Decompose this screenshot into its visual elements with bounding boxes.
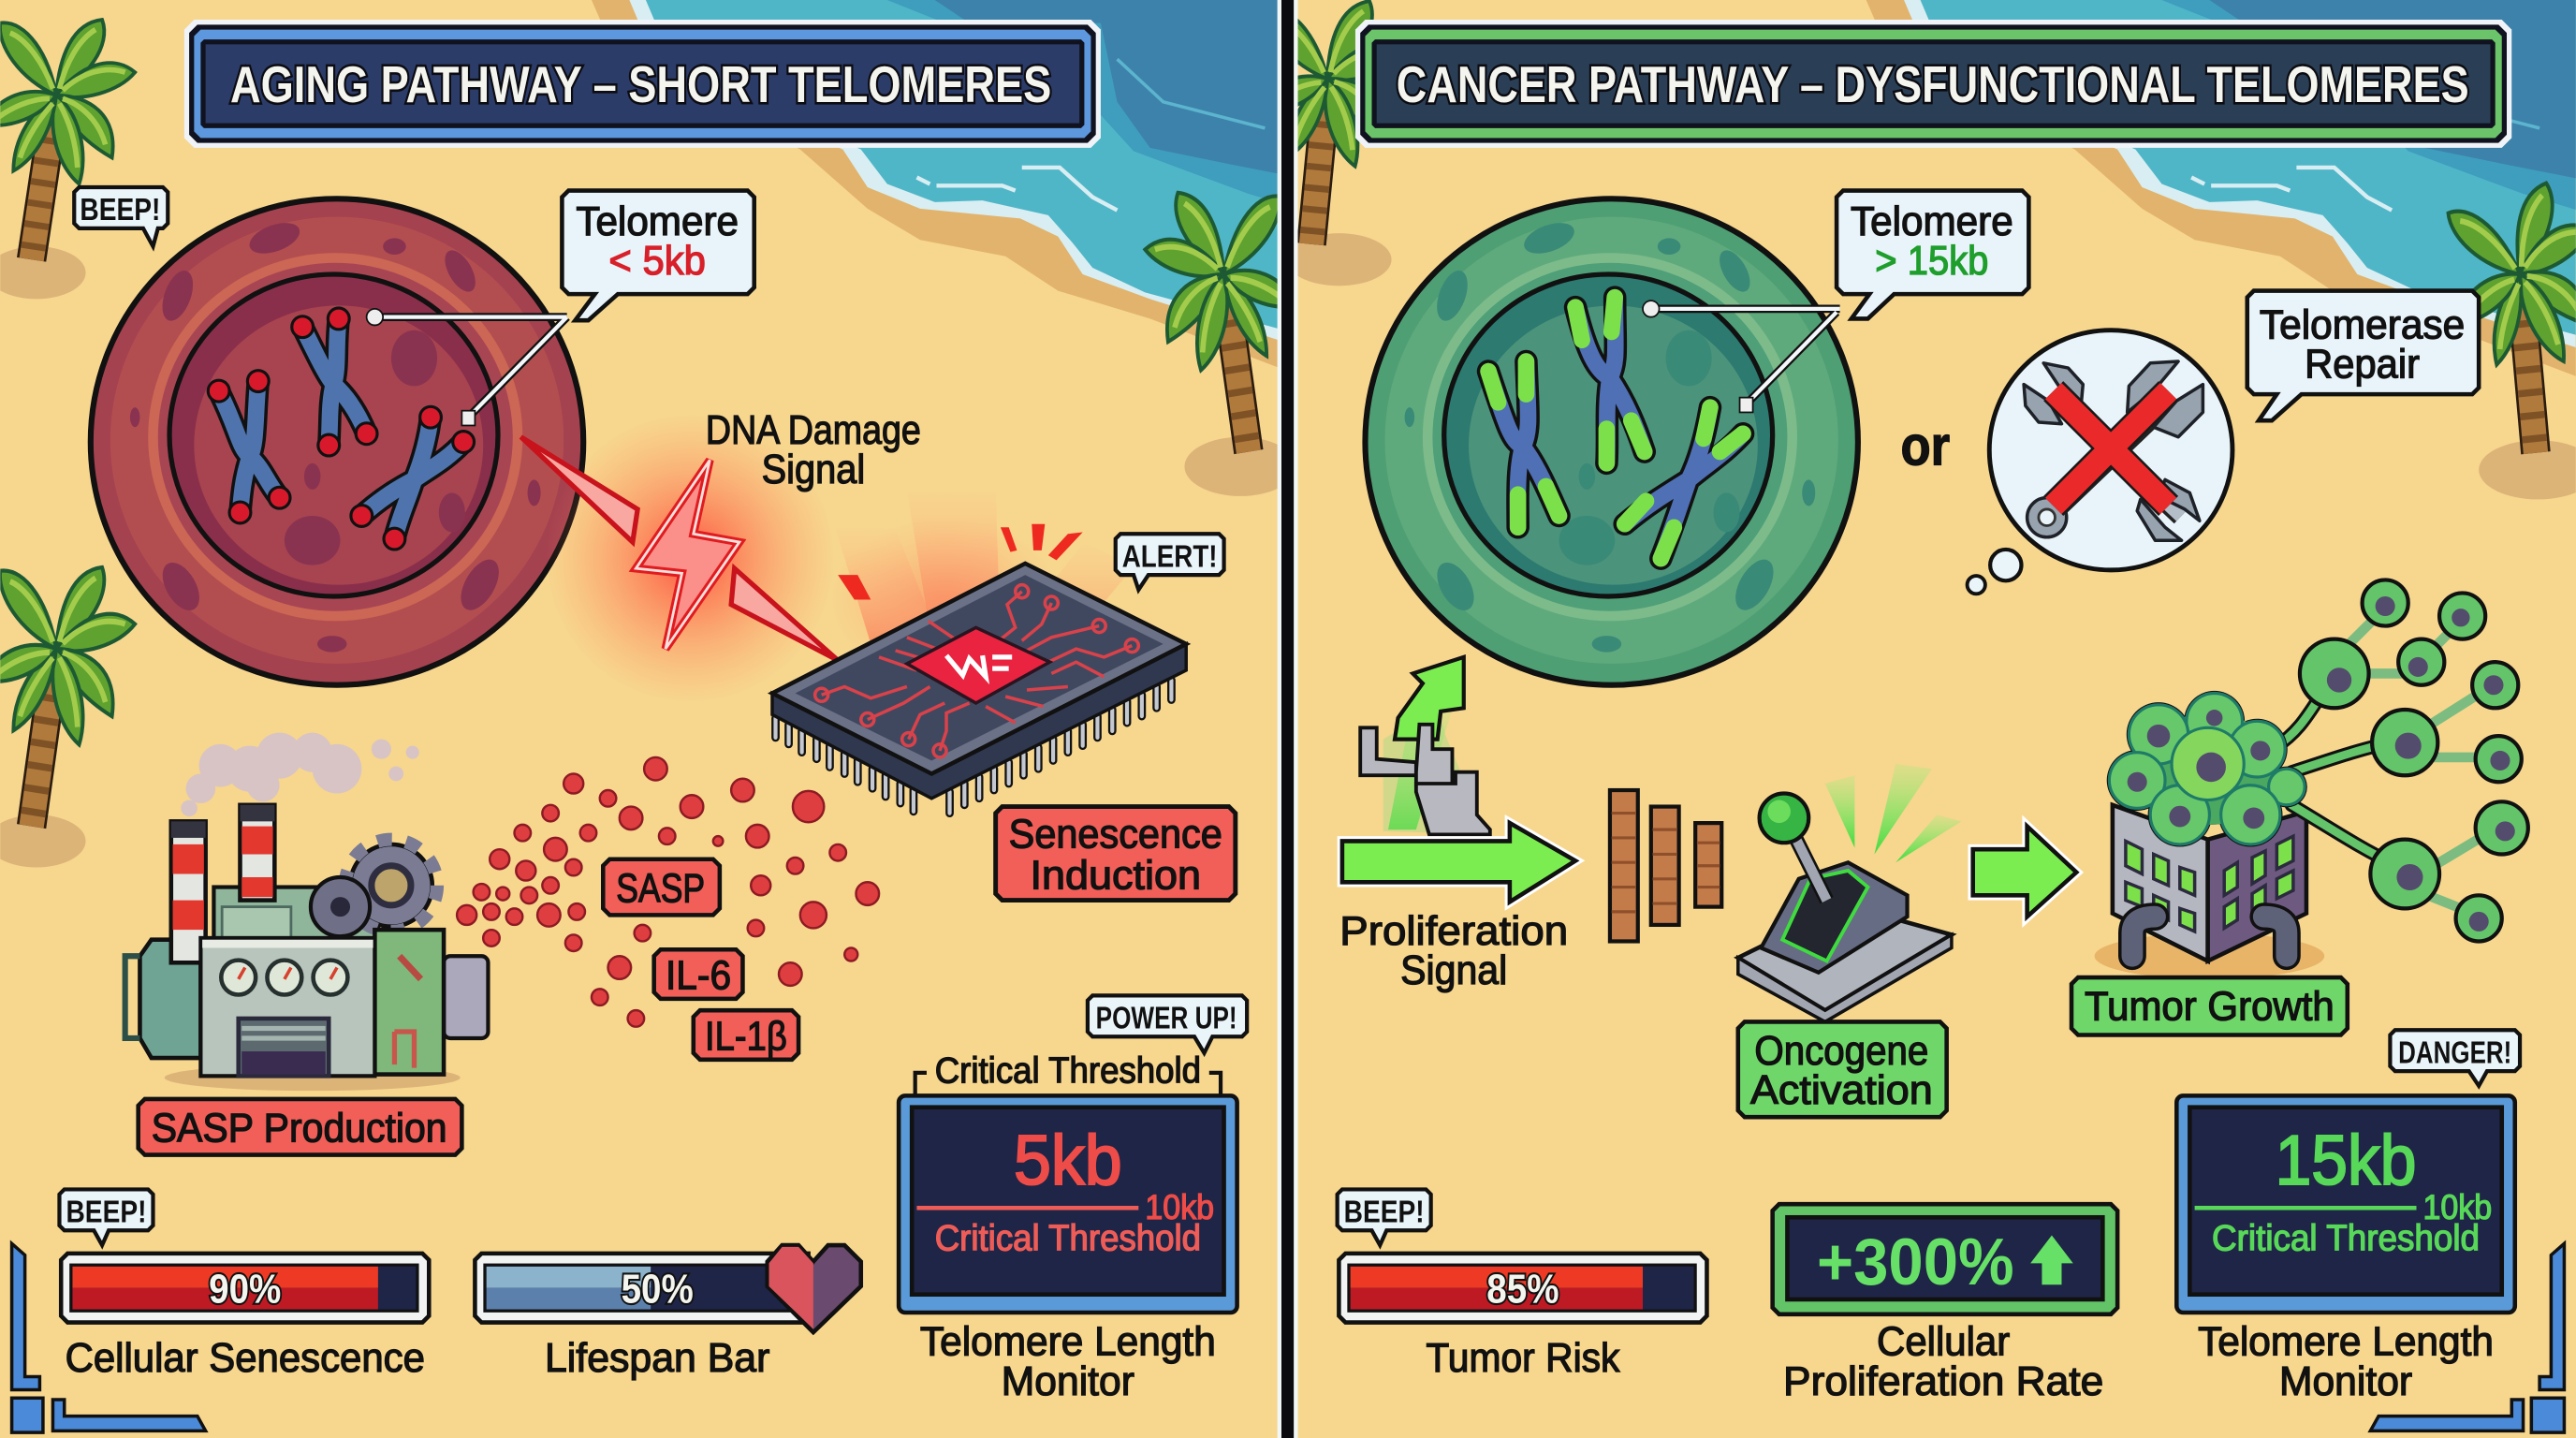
label: proliferation signal [1339, 908, 1568, 993]
palm trees right panel [1297, 0, 2576, 1314]
bar: tumor risk 85%: 85% [1486, 1266, 1559, 1312]
label: telomere length monitor [2198, 1319, 2494, 1404]
tumor cluster [2107, 691, 2307, 847]
stat box: +300% proliferation: +300% [1817, 1225, 2014, 1299]
label: IL-1 beta: IL-1β [705, 1013, 787, 1059]
label: oncogene activation [1738, 1021, 1947, 1117]
label: proliferation signal: Signal [1400, 947, 1507, 993]
smoke [181, 733, 419, 816]
label: lifespan bar: Lifespan Bar [545, 1335, 769, 1381]
label: cellular proliferation rate [1783, 1319, 2103, 1404]
cell: cancer [1365, 198, 1858, 685]
sparks [838, 524, 1083, 599]
telomere length monitor: aging [899, 1095, 1237, 1313]
gears [350, 844, 432, 927]
windows [2126, 836, 2293, 932]
tumor cells [2300, 580, 2528, 941]
SASP particles [457, 757, 879, 1027]
bar: lifespan 50% [475, 1245, 861, 1332]
left tank [139, 940, 200, 1058]
panel: cancer pathway [1251, 0, 2576, 1432]
speech bubble: alert: ALERT! [1122, 539, 1218, 574]
label: cellular senescence: Cellular Senescence [66, 1335, 425, 1381]
label: SASP production: SASP Production [152, 1106, 447, 1152]
speech bubble: beep lower: BEEP! [66, 1196, 146, 1230]
speech bubble: beep lower [59, 1189, 153, 1245]
label: telomere length monitor: Monitor [1002, 1358, 1134, 1404]
right wing [444, 956, 488, 1038]
label: cellular proliferation rate: Cellular [1877, 1319, 2010, 1365]
speech bubble: alert [1116, 534, 1224, 590]
label: or: or [1901, 415, 1950, 477]
callout: telomere over 15kb: > 15kb [1875, 238, 1988, 284]
broken bricks [1360, 725, 1490, 834]
label: senescence induction [996, 807, 1236, 901]
label: IL-6: IL-6 [666, 952, 731, 998]
label: senescence induction: Senescence [1009, 811, 1222, 857]
callout: telomere over 15kb: Telomere [1851, 198, 2013, 244]
ocean right [1866, 0, 2576, 376]
HUD corner left [12, 1243, 206, 1432]
label: DNA damage signal: DNA Damage [706, 407, 921, 453]
callout: telomerase repair: Repair [2305, 342, 2420, 388]
label: proliferation signal: Proliferation [1339, 908, 1568, 954]
bar: lifespan 50%: 50% [622, 1266, 694, 1312]
label: oncogene activation: Activation [1750, 1067, 1933, 1113]
telomere length monitor: cancer: 10kb [2423, 1188, 2492, 1226]
nuclei [2128, 596, 2515, 932]
critical threshold bracket: Critical Threshold [935, 1050, 1201, 1091]
arrow: proliferation breaking through wall [1360, 657, 1490, 834]
speech bubble: beep right: BEEP! [1344, 1196, 1425, 1230]
wrenches [2047, 404, 2182, 518]
bar: tumor risk 85% [1339, 1254, 1706, 1323]
gauges [221, 961, 347, 994]
divider [1278, 0, 1298, 1438]
telomere length monitor: cancer: Critical Threshold [2212, 1218, 2480, 1258]
telomere length monitor: cancer [2176, 1095, 2515, 1313]
chip glow and rays [546, 414, 1134, 703]
label: telomere length monitor: Monitor [2279, 1358, 2412, 1404]
branches [2276, 621, 2481, 908]
label: senescence induction: Induction [1031, 852, 1201, 898]
telomere length monitor: aging: 10kb [1145, 1188, 1214, 1226]
chromosomes: cancer [1488, 298, 1743, 559]
door [239, 1019, 329, 1076]
telomere length monitor: aging: Critical Threshold [935, 1218, 1201, 1258]
circuit traces [815, 585, 1138, 757]
icon: brick walls [1610, 790, 1721, 941]
speech bubble: power up: POWER UP! [1096, 1001, 1237, 1035]
callout: telomere under 5kb: Telomere [576, 198, 739, 244]
telomere length monitor: aging: 5kb [1014, 1121, 1122, 1199]
icon: heart [768, 1245, 861, 1332]
label: DNA damage signal: Signal [762, 447, 865, 492]
speech bubble: danger: DANGER! [2398, 1035, 2511, 1070]
arrow: proliferation signal [1342, 823, 1575, 902]
icon: SASP factory [125, 733, 488, 1091]
label: oncogene activation: Oncogene [1754, 1028, 1928, 1074]
chromosomes: aging [208, 308, 475, 550]
speech bubble: beep top [74, 187, 168, 246]
stat box: +300% proliferation [1773, 1204, 2117, 1314]
label: telomere length monitor [920, 1319, 1216, 1404]
cell: aging [91, 198, 583, 685]
icon: senescence chip [772, 524, 1186, 814]
icon: up arrow [2030, 1236, 2073, 1284]
label: tumor risk: Tumor Risk [1426, 1335, 1620, 1381]
ocean left [592, 0, 1278, 367]
speech bubble: beep top: BEEP! [80, 193, 160, 227]
speech bubble: power up [1088, 995, 1247, 1053]
back block [213, 888, 378, 943]
label: telomere length monitor: Telomere Length [2198, 1319, 2494, 1365]
arrow: to tumor growth [1973, 827, 2076, 917]
label: DNA damage signal [706, 407, 921, 492]
label: SASP [603, 859, 720, 915]
callout: telomerase repair [2247, 291, 2479, 420]
front block [200, 938, 374, 1076]
panel: aging pathway [0, 0, 1314, 1432]
arrow: damage signal lightning [521, 437, 838, 660]
icon: tumor building with metastatic cells [2095, 580, 2528, 979]
chimneys [171, 821, 206, 962]
speech bubble: danger [2390, 1030, 2520, 1086]
speech bubble: beep right [1338, 1189, 1431, 1245]
label: tumor growth: Tumor Growth [2085, 984, 2334, 1030]
callout: telomere under 5kb [367, 191, 754, 425]
title banner: aging [184, 20, 1101, 148]
pipes [2132, 917, 2287, 956]
label: telomere length monitor: Telomere Length [920, 1319, 1216, 1365]
icon: thought bubble broken telomerase repair [1968, 330, 2232, 594]
bar: cellular senescence 90%: 90% [209, 1266, 281, 1312]
label: cellular proliferation rate: Proliferation Rate [1783, 1358, 2103, 1404]
callout: telomere over 15kb [1643, 191, 2028, 412]
icon: oncogene lever [1738, 764, 1961, 1021]
title banner: aging: AGING PATHWAY – SHORT TELOMERES [230, 56, 1051, 113]
HUD corner right [2370, 1243, 2564, 1432]
bar: cellular senescence 90% [61, 1254, 429, 1323]
title banner: cancer [1355, 20, 2511, 148]
telomere length monitor: cancer: 15kb [2276, 1121, 2416, 1199]
callout: telomerase repair: Telomerase [2260, 301, 2465, 347]
label: SASP: SASP [616, 865, 705, 911]
callout: telomere under 5kb: < 5kb [608, 238, 706, 284]
